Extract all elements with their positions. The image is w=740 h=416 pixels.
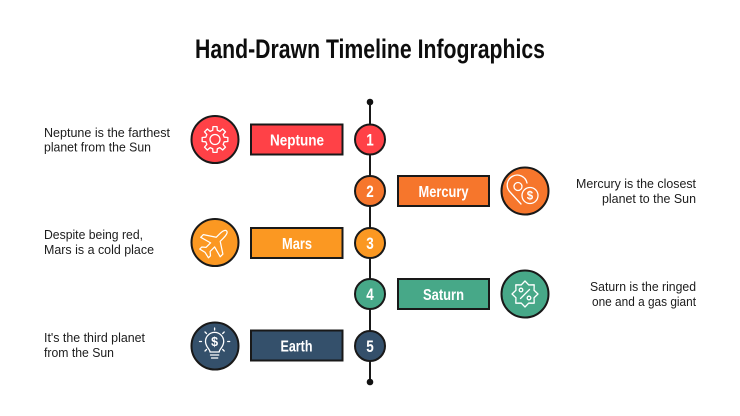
- label box: Mercury: [398, 176, 489, 206]
- title: Hand-Drawn Timeline Infographics: [195, 34, 545, 64]
- description: Saturn: Saturn is the ringed: [590, 280, 696, 294]
- node 2: [355, 176, 385, 206]
- description: Neptune: planet from the Sun: [44, 140, 151, 154]
- panel: Mercury: [355, 168, 697, 214]
- label box: Mars: Mars: [282, 236, 312, 253]
- icon: location pin with coin: $: [527, 190, 534, 202]
- description: Earth: It's the third planet: [44, 331, 146, 345]
- description: Mars: Mars is a cold place: [44, 243, 154, 257]
- description: Neptune: Neptune is the farthest: [44, 126, 171, 140]
- node 4: [355, 279, 385, 309]
- icon: gear: [192, 116, 238, 163]
- node 4: 4: [366, 286, 374, 304]
- icon: percent badge: [502, 270, 548, 318]
- panel: Neptune: [44, 116, 385, 163]
- panel: Earth: [44, 322, 385, 370]
- description: Mars: Despite being red,: [44, 228, 143, 242]
- node 1: 1: [366, 132, 374, 150]
- label box: Earth: Earth: [280, 338, 312, 356]
- icon: light bulb with dollar: $: [211, 335, 218, 349]
- label box: Saturn: [398, 279, 489, 309]
- label box: Neptune: [251, 124, 342, 154]
- description: Mercury: Mercury is the closest: [576, 177, 697, 191]
- panel: Saturn: [355, 270, 696, 318]
- node 1: [355, 124, 385, 154]
- label box: Earth: [251, 330, 342, 360]
- panel: Mars: [44, 219, 385, 266]
- node 2: 2: [366, 183, 374, 201]
- label box: Mars: [251, 228, 342, 258]
- description: Earth: from the Sun: [44, 346, 114, 360]
- icon: airplane: [192, 219, 238, 266]
- label box: Neptune: Neptune: [270, 132, 324, 150]
- description: Mercury: planet to the Sun: [602, 192, 696, 206]
- icon: location pin with coin: [502, 168, 548, 214]
- label box: Mercury: Mercury: [418, 184, 469, 201]
- timeline spine: [367, 99, 373, 385]
- node 5: [355, 331, 385, 361]
- icon: light bulb with dollar: [192, 322, 238, 370]
- node 3: 3: [366, 235, 374, 253]
- node 5: 5: [366, 338, 374, 356]
- node 3: [355, 228, 385, 258]
- label box: Saturn: Saturn: [423, 287, 464, 304]
- description: Saturn: one and a gas giant: [592, 295, 696, 309]
